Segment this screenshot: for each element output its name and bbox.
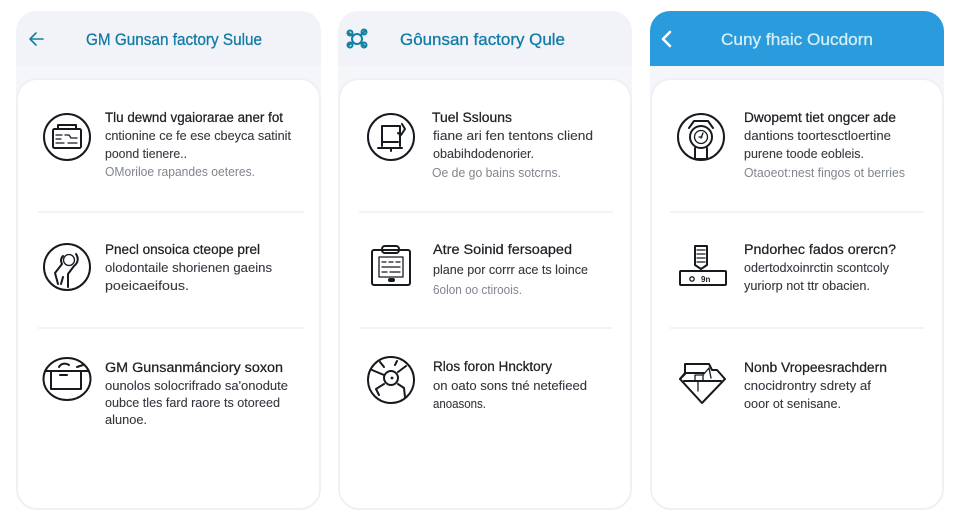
item: left row 2 text <box>105 242 273 293</box>
item: middle row 2 text: 6olon oo ctiroois. <box>433 283 522 297</box>
item: middle row 1 text <box>432 110 593 180</box>
item: right row 2 text: odertodxoinrctin scontcoly <box>744 260 889 275</box>
item: right row 3 text <box>744 360 887 411</box>
item: middle row 2 text <box>433 242 588 297</box>
item: right row 3 text: cnocidrontry sdrety af <box>744 378 871 393</box>
item: right row 1 text: Otaoeot:nest fingos ot berries <box>744 166 905 180</box>
divider <box>359 211 613 213</box>
item: right row 1 text: Dwopemt tiet ongcer ade <box>744 110 896 125</box>
right screen title: Cuny fhaic Oucdorn <box>721 30 873 49</box>
item: right row 2 text <box>744 242 896 293</box>
item: middle row 1 text: Tuel Sslouns <box>432 110 512 125</box>
item: right row 2 text: Pndorhec fados orercn? <box>744 242 896 257</box>
item: middle row 1 text: Oe de go bains sotcrns. <box>432 166 561 180</box>
item: left row 1 text: Tlu dewnd vgaiorarae aner fot <box>105 110 283 125</box>
item: left row 1 text: cntionine ce fe ese cbeyca satinit <box>105 128 291 143</box>
item: middle row 3 text <box>433 359 587 411</box>
divider <box>38 327 304 329</box>
item: left row 3 text: ounolos solocrifrado sa'onodute <box>105 378 288 393</box>
icon: clipboard <box>372 246 410 285</box>
icon: back chevron <box>663 32 670 46</box>
item: left row 2 text: poeicaeifous. <box>105 278 189 293</box>
item: right row 2 text: yuriorp not ttr obacien. <box>744 278 870 293</box>
item: middle row 3 text: anoasons. <box>433 396 486 411</box>
item: left row 1 text <box>105 110 291 179</box>
item: left row 1 text: poond tienere.. <box>105 146 187 161</box>
icon: wrench in circle <box>44 244 90 290</box>
divider <box>359 327 613 329</box>
icon: folded shield <box>680 364 725 403</box>
item: left row 2 text: olodontaile shorienen gaeins <box>105 260 273 275</box>
item: left row 1 text: OMoriloe rapandes oeteres. <box>105 165 255 179</box>
item: middle row 2 text: plane por corrr ace ts loince <box>433 262 588 277</box>
item: middle row 2 text: Atre Soinid fersoaped <box>433 242 572 257</box>
panel: left screen <box>16 11 321 509</box>
item: left row 3 text: GM Gunsanmánciory soxon <box>105 360 283 375</box>
item: right row 3 text: ooor ot senisane. <box>744 396 841 411</box>
panel: right screen <box>650 11 944 509</box>
item: left row 3 text: oubce tles fard raore ts otoreed <box>105 395 280 410</box>
item: right row 1 text: purene toode eobleis. <box>744 146 864 161</box>
divider <box>670 211 924 213</box>
item: right row 3 text: Nonb Vropeesrachdern <box>744 360 887 375</box>
icon: document on stand <box>368 114 414 160</box>
icon: gear network <box>348 30 366 48</box>
item: left row 2 text: Pnecl onsoica cteope prel <box>105 242 260 257</box>
item: left row 3 text <box>105 360 288 427</box>
divider <box>670 327 924 329</box>
item: left row 3 text: alunoe. <box>105 412 147 427</box>
middle screen title: Gôunsan factory Qule <box>400 30 565 49</box>
icon: workbench box <box>44 358 90 400</box>
item: middle row 3 text: Rlos foron Hncktory <box>433 359 552 374</box>
icon: toolbox <box>44 114 90 160</box>
item: middle row 1 text: fiane ari fen tentons cliend <box>433 128 593 143</box>
item: middle row 1 text: obabihdodenorier. <box>433 146 534 161</box>
icon: server on base <box>680 246 726 285</box>
panel: middle screen <box>338 11 632 509</box>
divider <box>38 211 304 213</box>
icon: back arrow <box>30 33 43 45</box>
icon: cracked gear <box>368 357 414 403</box>
icon: server on base: 9n <box>701 275 710 284</box>
item: right row 1 text <box>744 110 905 180</box>
left screen title: GM Gunsan factory Sulue <box>86 30 262 49</box>
icon: gauge dial <box>678 114 724 160</box>
item: middle row 3 text: on oato sons tné netefieed <box>433 378 587 393</box>
item: right row 1 text: dantions toortesctloertine <box>744 128 891 143</box>
